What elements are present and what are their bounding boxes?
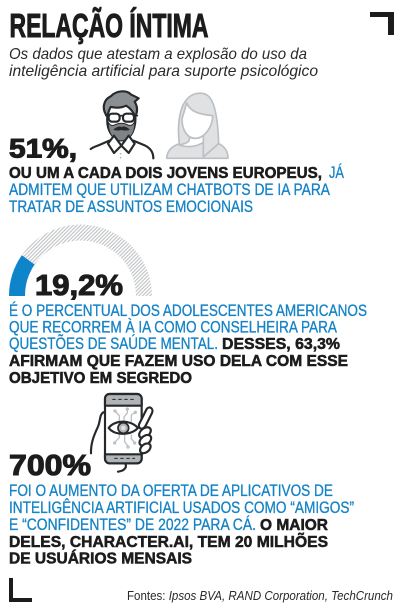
text block: American teens: QUESTÕES DE SAÚDE MENTAL.	[9, 333, 218, 353]
icon: man with glasses	[91, 91, 153, 158]
text block: American teens: DESSES, 63,3%	[222, 336, 340, 353]
text block: European youth: OU UM A CADA DOIS JOVENS EUROPEUS,	[9, 165, 322, 182]
stat: 19,2%: 19,2%	[35, 270, 123, 302]
text block: American teens	[9, 301, 367, 387]
text block: companion apps: DE USUÁRIOS MENSAIS	[9, 548, 192, 568]
text block: American teens: OBJETIVO EM SEGREDO	[9, 370, 192, 387]
title: RELAÇÃO ÍNTIMA	[10, 7, 208, 45]
text block: American teens: AFIRMAM QUE FAZEM USO DELA COM ESSE	[9, 353, 348, 370]
stat: 51%: 51%,	[9, 134, 77, 164]
text block: companion apps: DELES, CHARACTER.AI, TEM 20 MILHÕES	[9, 531, 328, 551]
text block: American teens: QUE RECORREM À IA COMO CONSELHEIRA PARA	[9, 318, 337, 336]
icon: woman silhouette	[167, 93, 228, 158]
text block: European youth: JÁ	[329, 163, 344, 182]
text block: European youth: TRATAR DE ASSUNTOS EMOCIONAIS	[9, 198, 253, 216]
corner mark: bottom left	[9, 578, 32, 602]
stat: 700%: 700%	[9, 450, 91, 482]
corner mark: top right	[370, 12, 394, 35]
text block: European youth	[9, 163, 344, 216]
gauge chart: 19.2%	[9, 225, 152, 296]
text block: companion apps: O MAIOR	[260, 517, 328, 534]
text block: European youth: ADMITEM QUE UTILIZAM CHATBOTS DE IA PARA	[9, 181, 330, 199]
text block: companion apps	[9, 482, 354, 568]
text block: companion apps: E “CONFIDENTES” DE 2022 PARA CÁ.	[9, 515, 256, 534]
subtitle	[9, 46, 318, 80]
icon: hand holding phone with eye	[91, 394, 153, 472]
subtitle: inteligência artificial para suporte psicológico	[9, 63, 318, 80]
text block: companion apps: FOI O AUMENTO DA OFERTA DE APLICATIVOS DE	[9, 482, 333, 500]
subtitle: Os dados que atestam a explosão do uso da	[9, 46, 307, 63]
